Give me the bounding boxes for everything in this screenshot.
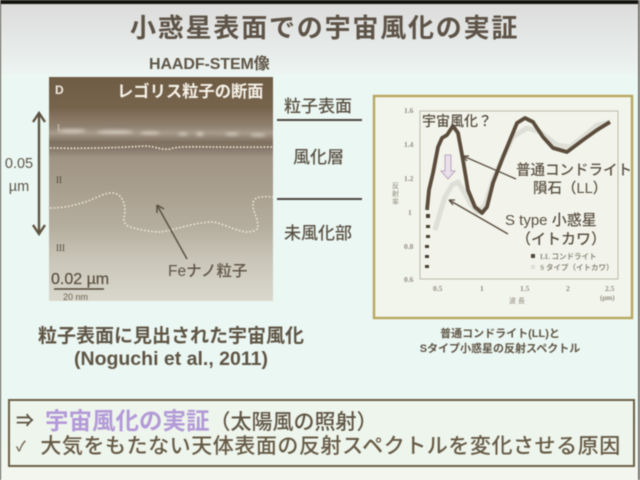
axis tick labels: 1 <box>480 284 484 293</box>
chart legend <box>531 252 614 272</box>
axis tick labels: 1.2 <box>404 174 414 183</box>
title: 小惑星表面での宇宙風化の実証 <box>130 13 519 43</box>
S-type curve <box>435 122 610 230</box>
axis titles: 波 長 <box>509 296 525 305</box>
layer labels <box>276 96 363 243</box>
caption line: citation: (Noguchi et al., 2011) <box>74 348 268 370</box>
region marks I II III: III <box>56 243 65 253</box>
label: S type asteroid: S type 小惑星 <box>505 212 597 229</box>
region marks I II III: II <box>56 175 62 185</box>
scale value text <box>4 156 34 195</box>
conclusion box <box>8 399 635 467</box>
axis tick labels: 1.6 <box>404 106 414 115</box>
scale value text: 0.05 <box>5 156 33 172</box>
left caption <box>38 325 304 370</box>
chart legend: S タイプ（イトカワ） <box>540 262 614 272</box>
axis tick labels: 1.5 <box>520 284 530 293</box>
chart legend: LL コンドライト <box>540 252 596 261</box>
right caption <box>420 327 580 355</box>
axis tick labels: 2.5 <box>605 284 615 293</box>
label: particle surface: 粒子表面 <box>284 97 352 116</box>
region marks I II III <box>56 123 65 253</box>
panel: regolith cross-section micrograph <box>48 76 274 302</box>
panel heading: regolith cross-section: レゴリス粒子の断面 <box>117 82 264 101</box>
surface boundary dotted line <box>50 146 272 149</box>
axis titles: 射 <box>392 189 399 198</box>
conclusion line 2: ✓ 大気をもたない天体表面の反射スペクトルを変化させる原因 <box>16 435 621 458</box>
plot frame <box>420 111 618 279</box>
axis titles: 率 <box>392 198 399 206</box>
caption line: weathering found on particle surface: 粒子表面に見出された宇宙風化 <box>38 326 304 347</box>
lower boundary dotted line <box>50 193 273 232</box>
scale bar <box>51 271 109 302</box>
label: unweathered part: 未風化部 <box>284 224 352 243</box>
label: weathered layer: 風化層 <box>293 148 344 167</box>
divider: surface line <box>277 119 362 121</box>
scale arrow 0.05 µm <box>32 110 46 236</box>
pointer arrow to S type <box>449 200 508 234</box>
LL chondrite curve <box>427 118 610 213</box>
axis titles: 反 <box>392 182 399 190</box>
conclusion line 1: ⇒ 宇宙風化の実証（太陽風の照射） <box>16 408 378 434</box>
label: S type asteroid: （イトカワ） <box>516 231 606 248</box>
down arrow: reddening <box>441 155 455 179</box>
axis tick labels: 1.4 <box>404 140 414 149</box>
axis tick labels: 0.5 <box>433 284 443 293</box>
right caption: Sタイプ小惑星の反射スペクトル <box>420 343 580 355</box>
panel: reflectance spectrum chart <box>372 94 634 320</box>
right caption: 普通コンドライト(LL)と <box>440 328 560 340</box>
axis tick labels: 0.6 <box>404 275 414 284</box>
label: LL chondrite <box>516 162 632 197</box>
annotation: space weathering?: 宇宙風化？ <box>422 113 492 129</box>
divider: weathered boundary line <box>277 198 362 200</box>
bright particle band <box>58 129 266 136</box>
axis tick labels: 0.8 <box>404 242 414 251</box>
region marks I II III: I <box>57 123 60 133</box>
axis tick labels: 2 <box>566 284 570 293</box>
axis titles <box>392 182 525 305</box>
panel letter D: D <box>55 83 64 97</box>
axis tick labels: (µm) <box>600 294 615 302</box>
scale value text: µm <box>9 179 29 195</box>
pointer arrow to LL <box>463 156 516 179</box>
scale bar: 0.02 µm <box>51 271 109 288</box>
axis tick labels <box>404 106 615 302</box>
LL low-wavelength square markers <box>425 214 430 268</box>
label: LL chondrite: 普通コンドライト <box>516 162 632 179</box>
label: LL chondrite: 隕石（LL） <box>533 180 607 197</box>
axis tick labels: 1 <box>408 208 412 217</box>
label: Fe nanoparticles: Feナノ粒子 <box>168 262 247 280</box>
label: S type asteroid <box>505 212 606 248</box>
image label: HAADF-STEM: HAADF-STEM像 <box>149 56 270 73</box>
arrow to Fe nanoparticles <box>157 205 187 259</box>
